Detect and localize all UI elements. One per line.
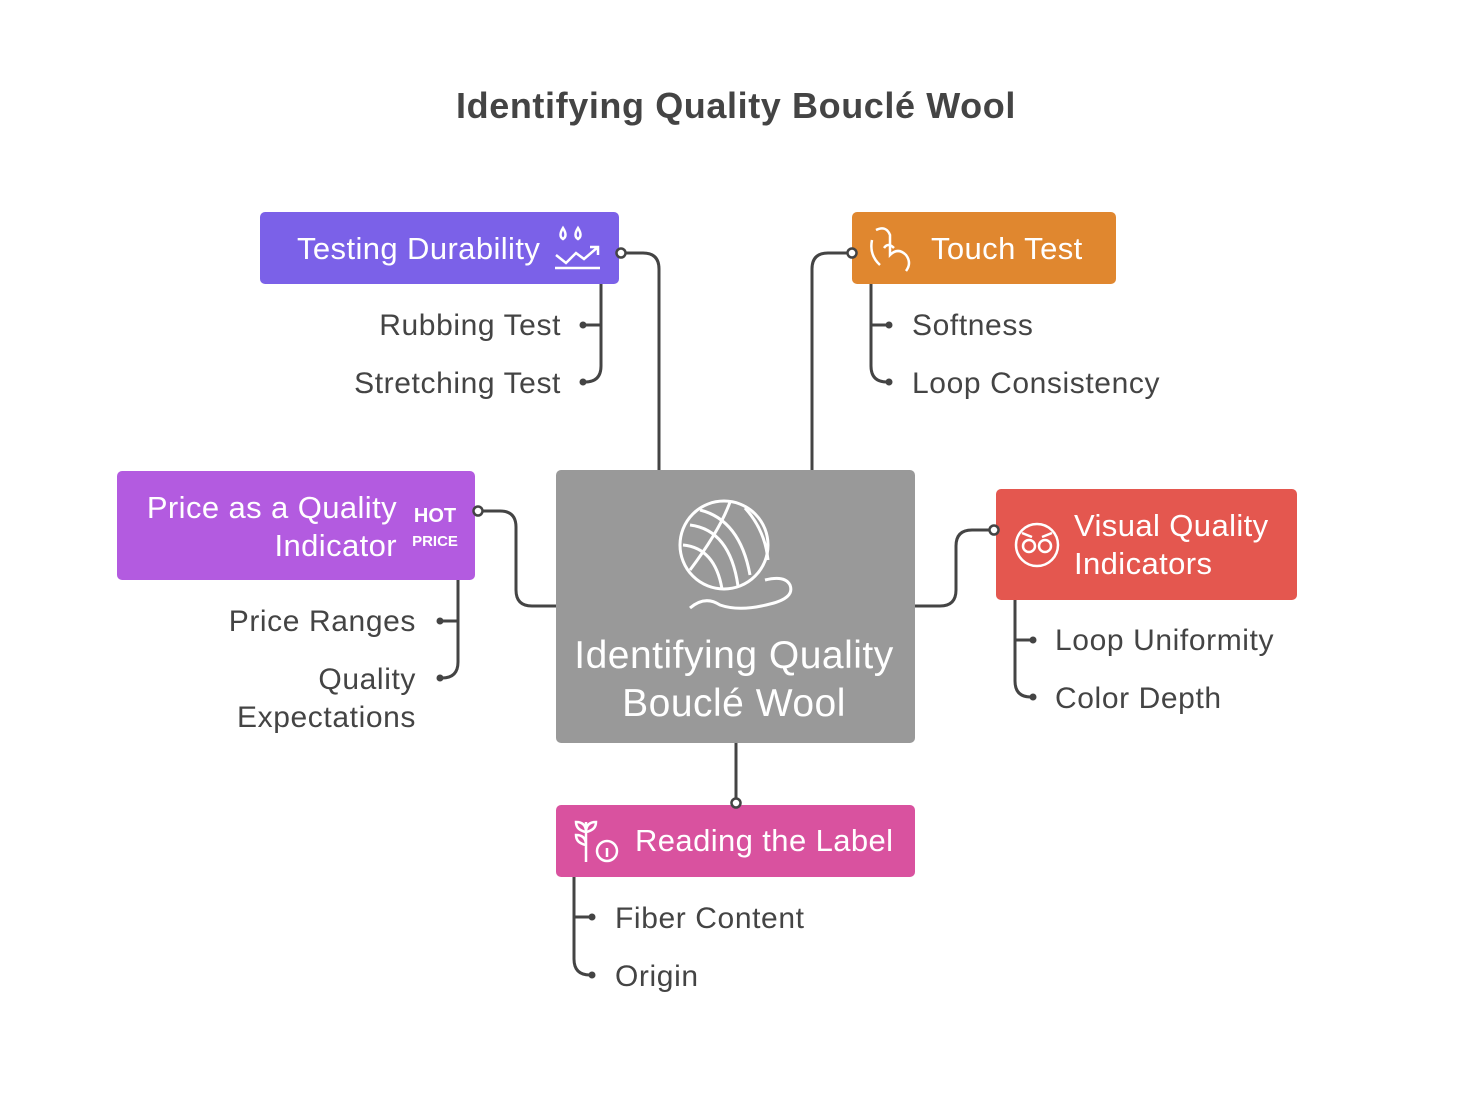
sub-items: price xyxy=(229,580,458,734)
panel: touch test: Touch Test xyxy=(931,231,1083,266)
panel: price xyxy=(117,471,482,580)
panel: visual: Visual Quality xyxy=(1074,508,1269,543)
panel: center: Identifying Quality xyxy=(574,634,894,677)
sub-items: visual xyxy=(1015,600,1274,715)
sub-items: reading the label: Origin xyxy=(615,960,699,993)
panel: price: Price as a Quality xyxy=(147,490,397,525)
sub-items: visual: Color Depth xyxy=(1055,682,1222,715)
sub-items: touch test xyxy=(871,284,1160,400)
sub-items: price: Quality xyxy=(318,663,416,696)
panel: center xyxy=(556,470,915,743)
sub-items: testing durability xyxy=(354,284,601,400)
panel: price: PRICE xyxy=(412,533,458,550)
sub-items: price: Expectations xyxy=(237,701,416,734)
sub-items: price: Price Ranges xyxy=(229,605,416,638)
panel: testing durability: Testing Durability xyxy=(297,231,540,266)
sub-items: visual: Loop Uniformity xyxy=(1055,624,1274,657)
panel: price: Indicator xyxy=(274,528,397,563)
panel: reading the label: Reading the Label xyxy=(635,823,893,858)
panel: visual xyxy=(990,489,1297,600)
panel: touch test xyxy=(848,212,1116,284)
sub-items: touch test: Softness xyxy=(912,309,1034,342)
sub-items: testing durability: Stretching Test xyxy=(354,367,561,400)
panel: testing durability xyxy=(260,212,626,284)
panel: reading the label xyxy=(556,798,915,877)
panel: center: Bouclé Wool xyxy=(622,682,846,725)
panel: price: HOT xyxy=(414,505,456,527)
sub-items: touch test: Loop Consistency xyxy=(912,367,1160,400)
sub-items: testing durability: Rubbing Test xyxy=(379,309,561,342)
connectors xyxy=(478,253,994,802)
sub-items: reading the label xyxy=(574,877,805,993)
sub-items: reading the label: Fiber Content xyxy=(615,902,805,935)
title: Identifying Quality Bouclé Wool xyxy=(456,85,1016,126)
panel: visual: Indicators xyxy=(1074,546,1212,581)
icon: yarn ball xyxy=(680,501,791,608)
